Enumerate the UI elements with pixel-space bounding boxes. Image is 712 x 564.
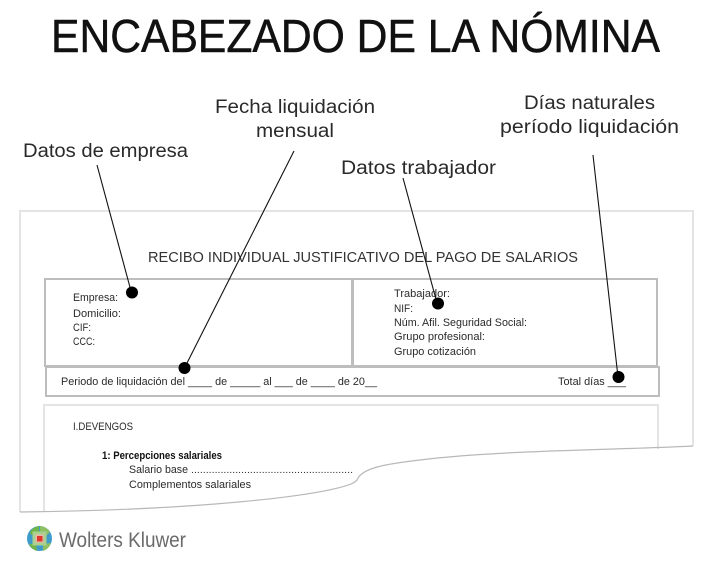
callout: company data [23, 141, 188, 298]
panel: settlement period: Periodo de liquidación del ____ de _____ al ___ de ____ de 20__ [61, 376, 378, 388]
panel: earnings section: Complementos salariales [129, 479, 251, 491]
panel: settlement period [46, 367, 659, 396]
panel: earnings section: Salario base [129, 464, 188, 476]
torn edge of the sheet [20, 446, 693, 512]
panel: company data: Domicilio: [73, 308, 121, 320]
panel: company data: Empresa: [73, 292, 118, 304]
panel: settlement period: Total días ___ [558, 376, 627, 388]
panel: company data [45, 279, 352, 366]
logo: Wolters Kluwer: Wolters Kluwer [59, 529, 186, 552]
callout: natural days [500, 93, 679, 383]
panel: worker data: Grupo cotización [394, 346, 476, 358]
icon: globe [27, 526, 52, 551]
panel: company data: CIF: [73, 322, 91, 334]
callout: settlement date [178, 97, 375, 374]
panel: worker data: Núm. Afil. Seguridad Social: [394, 317, 527, 329]
callout: company data: Datos de empresa [23, 141, 188, 162]
panel: worker data: Trabajador: [394, 288, 450, 300]
panel: company data: CCC: [73, 336, 95, 348]
logo: Wolters Kluwer [27, 526, 186, 552]
panel: payslip sheet outline [20, 211, 693, 512]
callout: settlement date: Fecha liquidación [215, 97, 375, 118]
panel: worker data: Grupo profesional: [394, 331, 485, 343]
title: ENCABEZADO DE LA NÓMINA [51, 10, 660, 62]
callout: worker data [341, 158, 497, 310]
panel: earnings section: 1: Percepciones salariales [102, 450, 222, 462]
panel: earnings section [44, 405, 658, 512]
callout: settlement date: mensual [256, 121, 334, 142]
panel: worker data: NIF: [394, 303, 413, 315]
callout: worker data: Datos trabajador [341, 158, 497, 179]
panel: earnings section: ....................................................... [191, 464, 353, 476]
payslip heading: RECIBO INDIVIDUAL JUSTIFICATIVO DEL PAGO DE SALARIOS [148, 249, 578, 266]
callout: natural days: período liquidación [500, 117, 679, 138]
callout: natural days: Días naturales [524, 93, 655, 114]
panel: worker data [353, 279, 657, 366]
panel: earnings section: I.DEVENGOS [73, 421, 133, 433]
